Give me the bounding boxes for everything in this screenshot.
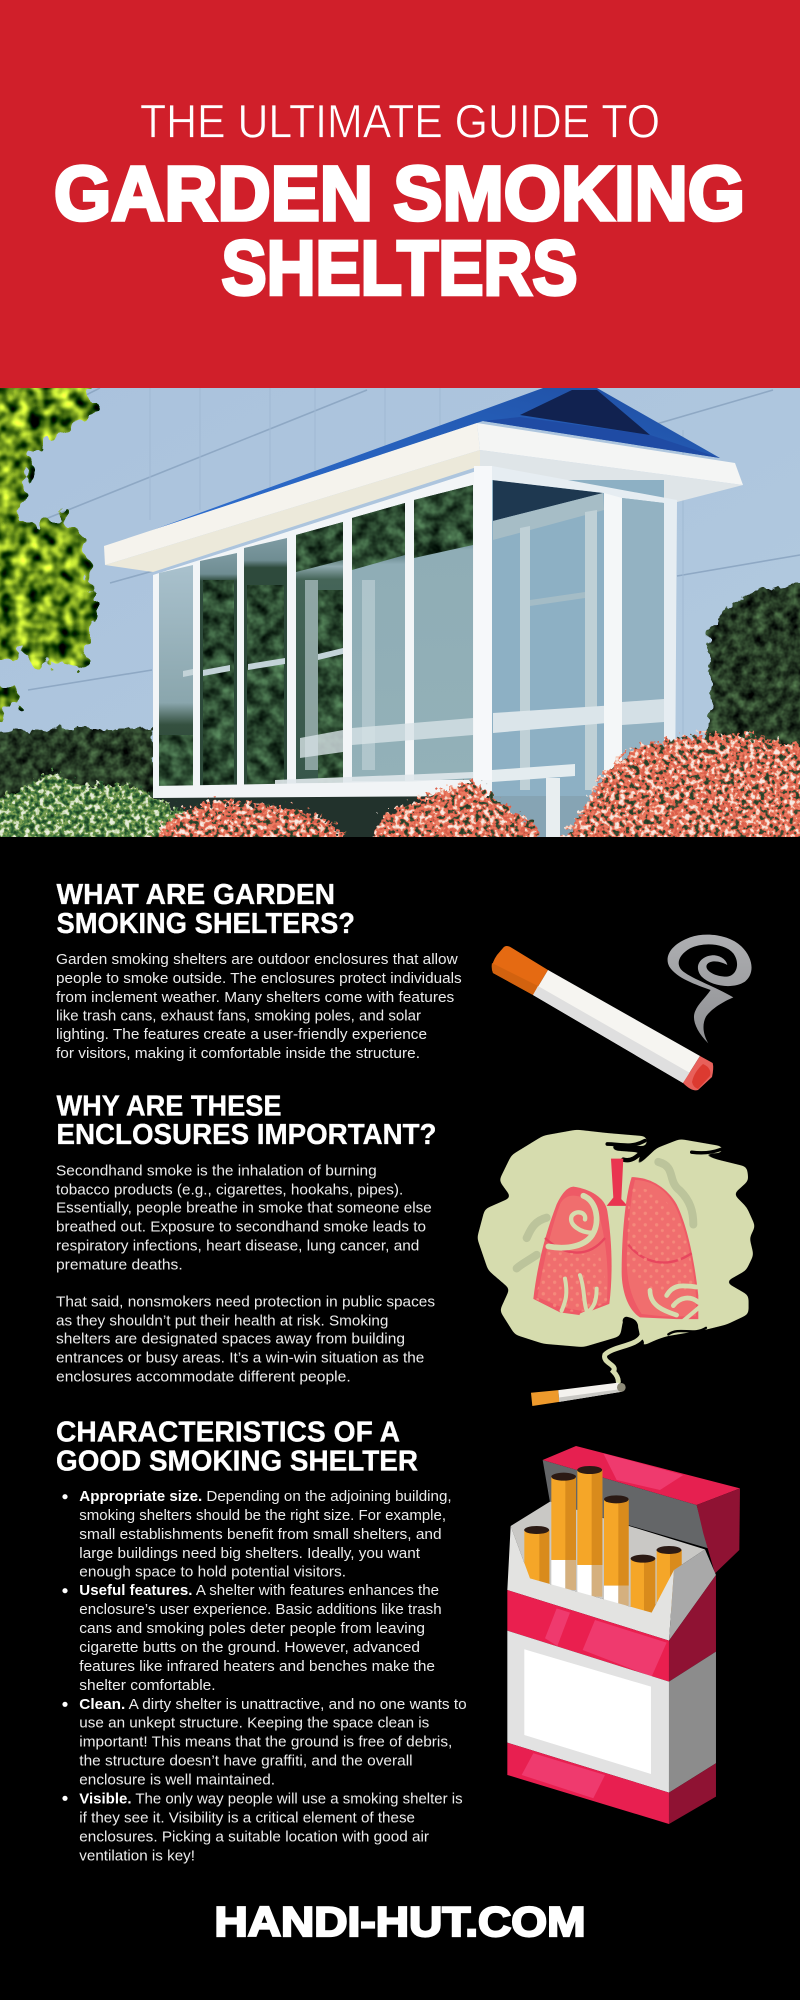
- cigarettes: [524, 1466, 682, 1615]
- reflected frames in the glass: [183, 580, 473, 790]
- tree with sunlit leaves: [0, 375, 92, 715]
- soffit: [105, 450, 480, 572]
- front frame: [153, 466, 492, 798]
- bullet: useful features: cans and smoking poles deter people from leaving: [79, 1620, 425, 1637]
- bullet: visible: [62, 1790, 463, 1864]
- title: main heading: SHELTERS: [222, 226, 578, 312]
- section 3 heading: CHARACTERISTICS OF A: [56, 1417, 400, 1449]
- bullet: useful features: features like infrared heaters and benches make the: [79, 1658, 435, 1675]
- bullet: useful features: enclosure’s user experience. Basic additions like trash: [79, 1601, 442, 1618]
- section 2 paragraph 2: enclosures accommodate different people.: [56, 1368, 351, 1385]
- black wisps cut into the cloud: [607, 1141, 721, 1343]
- glass panes: [159, 485, 664, 787]
- section 2 paragraph 1: breathed out. Exposure to secondhand smoke leads to: [56, 1218, 426, 1235]
- smoke trail: [605, 1336, 642, 1382]
- section 2 heading: WHY ARE THESE: [56, 1090, 282, 1122]
- section 2 heading: ENCLOSURES IMPORTANT?: [56, 1119, 436, 1151]
- section 1 heading: [56, 879, 355, 940]
- section 1 body text: like trash cans, exhaust fans, smoking poles, and solar: [56, 1008, 421, 1024]
- icon: cigarette pack: [507, 1446, 740, 1824]
- bullet: appropriate size: small establishments benefit from small shelters, and: [79, 1526, 442, 1543]
- bench leg: [546, 778, 560, 838]
- icon: cigarette smoke: [668, 935, 752, 1043]
- dark hedge left: [0, 724, 153, 798]
- section 2 paragraph 2: as they shouldn’t put their health at risk. Smoking: [56, 1312, 388, 1329]
- bullet: appropriate size: [62, 1488, 452, 1580]
- lungs: [533, 1159, 698, 1319]
- shadow under shelter: [153, 796, 492, 837]
- photo: smoking shelter outside a building: [0, 375, 800, 850]
- section 2 paragraph 1: Secondhand smoke is the inhalation of burning: [56, 1162, 377, 1179]
- section 2 heading: [56, 1090, 436, 1151]
- bullet: useful features: [62, 1582, 442, 1694]
- bullet: clean: enclosure is well maintained.: [79, 1772, 275, 1789]
- smoke swirling over lungs: [548, 1178, 699, 1321]
- bullet: visible: Visible. The only way people will use a smoking shelter is: [79, 1790, 463, 1807]
- bullet: useful features: shelter comfortable.: [79, 1677, 216, 1694]
- side frame and posts: [492, 466, 677, 747]
- bullet: clean: Clean. A dirty shelter is unattractive, and no one wants to: [79, 1696, 467, 1713]
- pack side: [669, 1575, 716, 1824]
- section 2 paragraph 1: Essentially, people breathe in smoke that someone else: [56, 1199, 432, 1216]
- smoke cloud: [477, 1130, 755, 1347]
- foil interior: [511, 1502, 705, 1613]
- shelter: [104, 388, 743, 838]
- section 2 paragraph 1: tobacco products (e.g., cigarettes, hookahs, pipes).: [56, 1181, 403, 1198]
- pack lid: [543, 1446, 740, 1573]
- icon: smoke-filled lungs: [477, 1130, 755, 1406]
- section 3 heading: GOOD SMOKING SHELTER: [56, 1446, 418, 1478]
- title: kicker line: THE ULTIMATE GUIDE TO: [140, 94, 660, 148]
- interior seen through open side: [492, 480, 664, 796]
- section 2 paragraph 2: entrances or busy areas. It’s a win-win situation as the: [56, 1349, 424, 1366]
- header panel: [0, 0, 800, 388]
- building wall: [0, 388, 800, 762]
- bullet: appropriate size: Appropriate size. Depending on the adjoining building,: [79, 1488, 452, 1505]
- fascia: [104, 423, 480, 565]
- section 2 paragraph 1: premature deaths.: [56, 1256, 183, 1273]
- bullet: useful features: cigarette butts on the ground. However, advanced: [79, 1639, 420, 1656]
- section 2 paragraph 2: [56, 1293, 435, 1385]
- dark bush right: [705, 582, 800, 748]
- bottom rail: [159, 782, 411, 790]
- section 1 body text: for visitors, making it comfortable inside the structure.: [56, 1045, 420, 1062]
- section 1 heading: SMOKING SHELTERS?: [56, 908, 355, 940]
- darker smoke wisps: [517, 1162, 693, 1268]
- title: main heading: GARDEN SMOKING: [54, 151, 745, 237]
- bullet: useful features: Useful features. A shelter with features enhances the: [79, 1582, 439, 1599]
- section 2 paragraph 2: shelters are designated spaces away from building: [56, 1330, 405, 1347]
- section 1 body text: lighting. The features create a user-friendly experience: [56, 1026, 427, 1043]
- section 2 paragraph 1: [56, 1162, 432, 1273]
- bullet: clean: use an unkept structure. Keeping the space clean is: [79, 1715, 429, 1732]
- section 2 paragraph 2: That said, nonsmokers need protection in public spaces: [56, 1293, 435, 1310]
- section 1 body text: from inclement weather. Many shelters come with features: [56, 989, 454, 1006]
- bullet: clean: [62, 1696, 467, 1789]
- pack front: [507, 1590, 669, 1824]
- bullet: appropriate size: large buildings need big shelters. Ideally, you want: [79, 1545, 421, 1562]
- pink flowering bushes: [143, 735, 800, 850]
- footer website: HANDI-HUT.COM: [214, 1898, 586, 1945]
- icon: cigarette: [492, 946, 713, 1090]
- section 1 body text: Garden smoking shelters are outdoor enclosures that allow: [56, 951, 458, 968]
- bullet: visible: if they see it. Visibility is a critical element of these: [79, 1809, 415, 1826]
- foil front flap: [507, 1526, 674, 1641]
- section 2 paragraph 1: respiratory infections, heart disease, lung cancer, and: [56, 1237, 419, 1254]
- title: main heading: [54, 151, 745, 312]
- green flowering bush: [0, 768, 186, 837]
- section 1 body text: people to smoke outside. The enclosures protect individuals: [56, 970, 462, 987]
- section 1 body text: [56, 951, 462, 1062]
- lit cigarette: [531, 1383, 626, 1406]
- bullet: appropriate size: enough space to hold potential visitors.: [79, 1564, 346, 1580]
- bullet: clean: the structure doesn’t have graffiti, and the overall: [79, 1753, 413, 1770]
- corner post: [474, 466, 492, 472]
- bullet: clean: important! This means that the ground is free of debris,: [79, 1734, 452, 1751]
- section 3 heading: [56, 1417, 418, 1478]
- section 1 heading: WHAT ARE GARDEN: [56, 879, 335, 911]
- bullet: visible: enclosures. Picking a suitable location with good air: [79, 1828, 429, 1845]
- tree reflections in the glass: [159, 485, 473, 787]
- bullet: appropriate size: smoking shelters should be the right size. For example,: [79, 1507, 446, 1524]
- blue roof: [150, 388, 720, 531]
- bullet: visible: ventilation is key!: [79, 1847, 195, 1864]
